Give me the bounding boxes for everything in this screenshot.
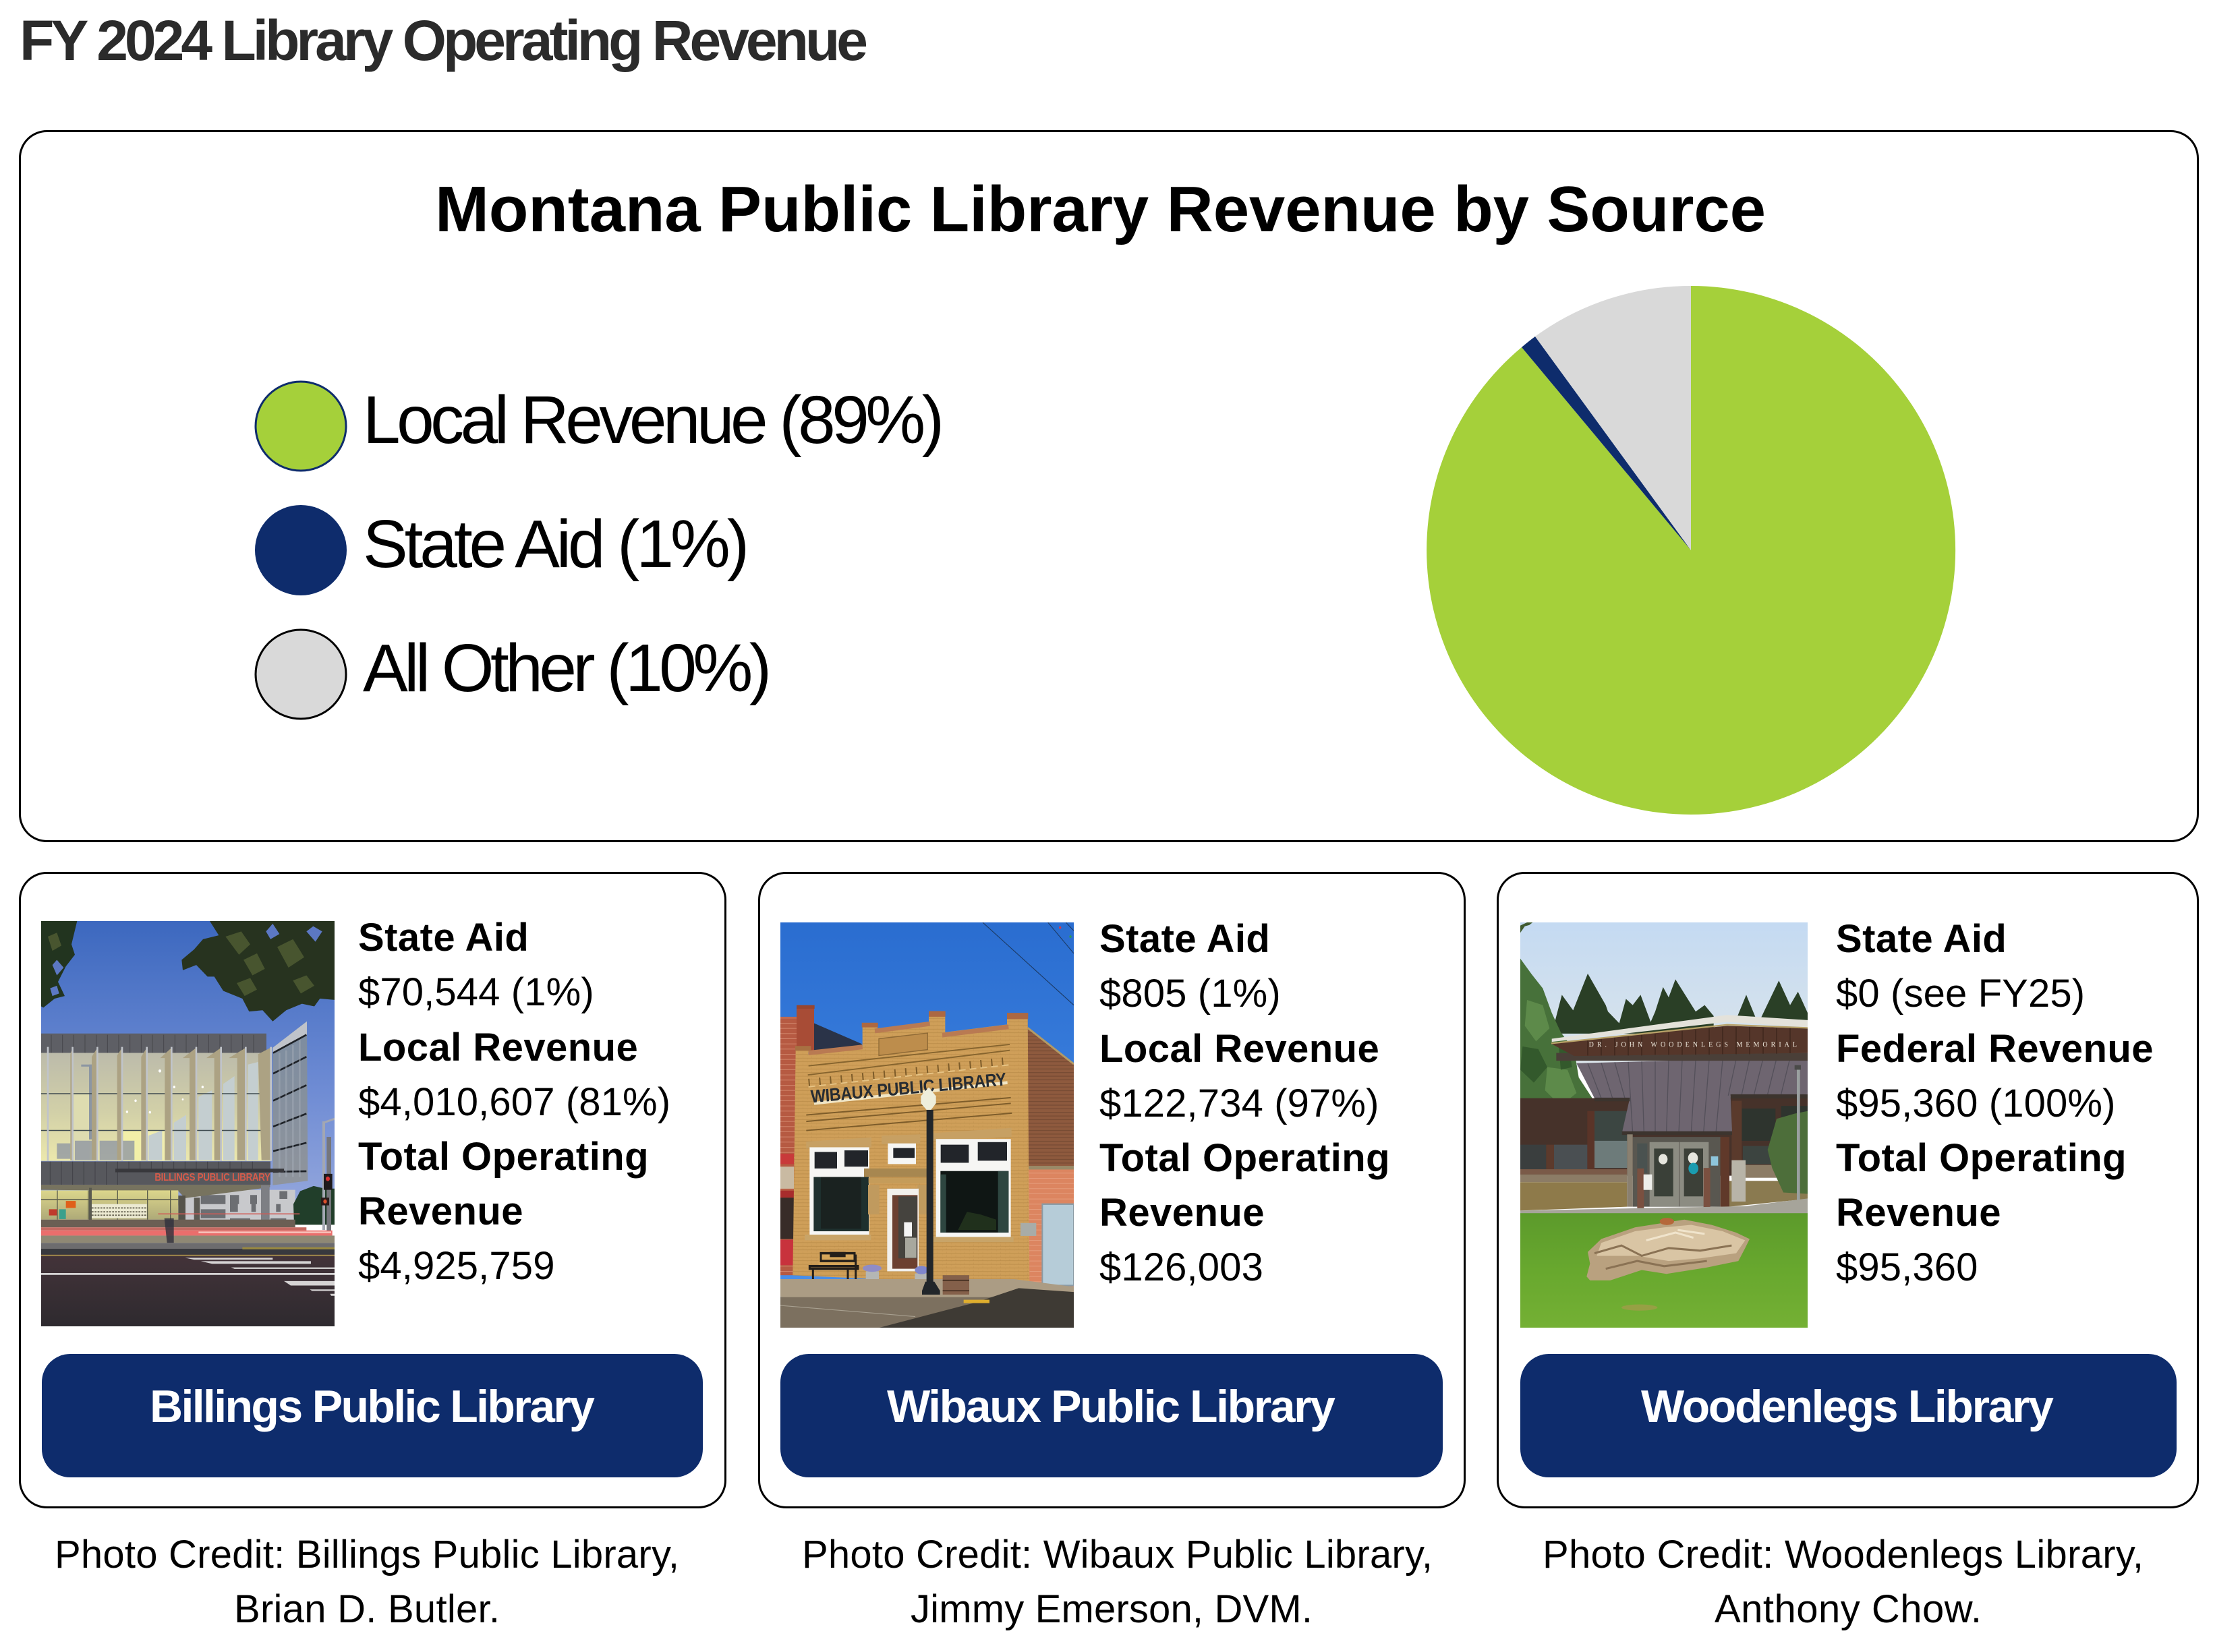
- photo credit: Billings: Brian D. Butler.: [234, 1587, 500, 1631]
- stats text: [1099, 917, 1390, 1289]
- photo credit: Billings: [55, 1533, 679, 1631]
- stats text: Local Revenue: [1099, 1027, 1379, 1071]
- legend item: state aid: State Aid (1%): [363, 506, 749, 582]
- legend item: state aid: [255, 505, 749, 595]
- page title: FY 2024 Library Operating Revenue: [20, 9, 868, 72]
- panel: Woodenlegs Library: [1497, 873, 2197, 1508]
- photo: Billings Public Library: BILLINGS PUBLIC LIBRARY: [154, 1172, 270, 1183]
- photo: Billings Public Library: [41, 921, 335, 1326]
- photo credit: Wibaux: Photo Credit: Wibaux Public Library,: [802, 1533, 1433, 1576]
- library name button: [780, 1354, 1443, 1477]
- stats text: $70,544 (1%): [358, 970, 594, 1014]
- library name button: Wibaux Public Library: [887, 1381, 1335, 1432]
- library name button: Woodenlegs Library: [1641, 1381, 2054, 1432]
- panel: Montana revenue by source: [20, 131, 2197, 842]
- legend item: all other: [256, 630, 772, 719]
- panel: Wibaux Public Library: [759, 873, 1465, 1508]
- photo credit: Wibaux: [802, 1533, 1433, 1631]
- stats text: $95,360: [1836, 1245, 1978, 1289]
- stats text: $4,925,759: [358, 1244, 555, 1288]
- stats text: $126,003: [1099, 1245, 1263, 1289]
- stats text: [1836, 917, 2154, 1289]
- library name button: [42, 1354, 703, 1477]
- library name button: Billings Public Library: [150, 1381, 595, 1432]
- stats text: Total Operating: [1836, 1136, 2127, 1180]
- facade lettering: WIBAUX PUBLIC LIBRARY: [810, 1069, 1007, 1107]
- stats text: Federal Revenue: [1836, 1027, 2154, 1071]
- stats text: $805 (1%): [1099, 972, 1281, 1015]
- stats text: Local Revenue: [358, 1026, 638, 1069]
- stats text: $122,734 (97%): [1099, 1082, 1379, 1125]
- stats text: State Aid: [1836, 917, 2007, 961]
- stats text: Revenue: [1099, 1191, 1265, 1235]
- stats text: State Aid: [1099, 917, 1270, 961]
- legend item: local revenue: Local Revenue (89%): [363, 382, 944, 458]
- legend item: all other: All Other (10%): [363, 630, 772, 706]
- photo credit: Wibaux: Jimmy Emerson, DVM.: [911, 1587, 1313, 1631]
- photo: Wibaux Public Library: [780, 922, 1074, 1328]
- stats text: Total Operating: [1099, 1136, 1390, 1180]
- pie chart: [1427, 286, 1955, 815]
- stats text: $95,360 (100%): [1836, 1082, 2116, 1125]
- stats text: State Aid: [358, 916, 529, 960]
- photo credit: Billings: Photo Credit: Billings Public Library,: [55, 1533, 679, 1576]
- legend: [255, 382, 944, 719]
- stats text: Revenue: [1836, 1191, 2001, 1235]
- library name button: [1520, 1354, 2177, 1477]
- stats text: [358, 916, 670, 1288]
- stats text: Revenue: [358, 1189, 523, 1233]
- photo credit: Woodenlegs: [1543, 1533, 2144, 1631]
- panel heading: Montana Public Library Revenue by Source: [435, 173, 1766, 245]
- stats text: Total Operating: [358, 1135, 649, 1179]
- photo credit: Woodenlegs: Anthony Chow.: [1715, 1587, 1982, 1631]
- panel: Billings Public Library: [20, 873, 726, 1508]
- fascia lettering: DR. JOHN WOODENLEGS MEMORIAL: [1589, 1040, 1797, 1049]
- stats text: $0 (see FY25): [1836, 972, 2085, 1015]
- stats text: $4,010,607 (81%): [358, 1080, 670, 1124]
- photo: Woodenlegs Library: [1520, 922, 1808, 1328]
- photo credit: Woodenlegs: Photo Credit: Woodenlegs Library,: [1543, 1533, 2144, 1576]
